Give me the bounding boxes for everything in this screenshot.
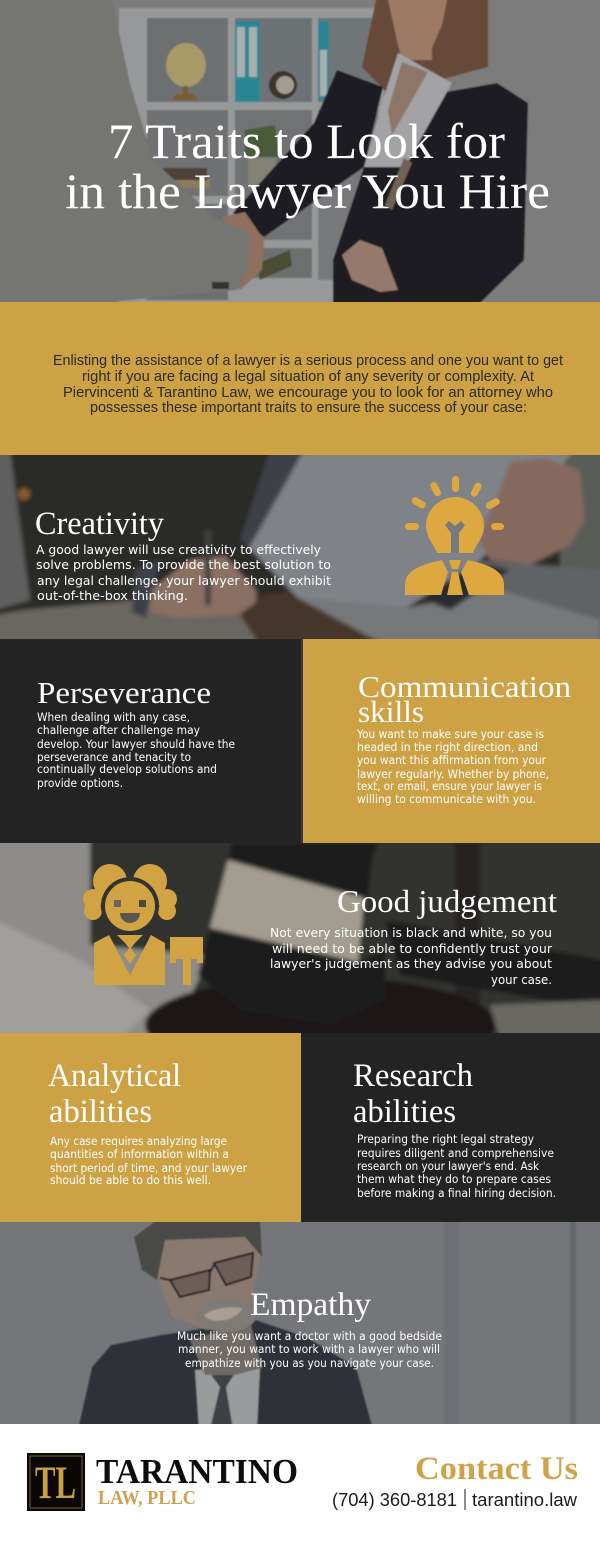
body text: analytical abilities: short period of time, and your lawyer — [50, 1162, 247, 1175]
body text: good judgement: your case. — [491, 972, 552, 987]
panel: empathy — [0, 1217, 600, 1429]
body text: perseverance: challenge after challenge may — [37, 724, 200, 737]
heading: communication skills: Communication — [358, 669, 572, 704]
company name — [96, 1452, 298, 1509]
intro text — [53, 353, 563, 416]
body text: perseverance: continually develop solutions and — [37, 763, 217, 776]
body text: communication skills: you want this affirmation from your — [357, 754, 546, 767]
body text: analytical abilities — [50, 1135, 247, 1187]
contact heading: Contact Us — [415, 1451, 578, 1487]
intro text: Piervincenti & Tarantino Law, we encourage you to look for an attorney who — [63, 385, 553, 401]
heading: empathy: Empathy — [250, 1287, 371, 1323]
body text: creativity: A good lawyer will use creativity to effectively — [36, 542, 322, 557]
body text: perseverance: When dealing with any case, — [37, 711, 190, 724]
body text: analytical abilities: quantities of information within a — [50, 1148, 229, 1161]
heading: perseverance: Perseverance — [37, 675, 211, 710]
body text: perseverance: provide options. — [37, 777, 123, 790]
company name: LAW, PLLC — [98, 1487, 196, 1509]
heading: research abilities: Research — [353, 1058, 473, 1094]
panel: introduction — [0, 302, 600, 455]
intro text: right if you are facing a legal situation of any severity or complexity. At — [82, 369, 534, 385]
body text: perseverance: develop. Your lawyer should have the — [37, 738, 235, 751]
title: 7 Traits to Look for — [108, 113, 505, 169]
heading: creativity: Creativity — [35, 506, 164, 542]
body text: good judgement: Not every situation is black and white, so you — [270, 925, 552, 940]
contact details: (704) 360-8181 — [332, 1490, 457, 1510]
contact details: tarantino.law — [472, 1490, 578, 1510]
contact details — [332, 1489, 578, 1510]
heading: communication skills — [358, 669, 572, 729]
body text: perseverance — [37, 711, 235, 790]
woman figure — [233, 0, 528, 305]
body text: empathy — [177, 1330, 442, 1370]
body text: communication skills: text, or email, ensure your lawyer is — [357, 780, 542, 793]
body text: perseverance: perseverance and tenacity to — [37, 751, 191, 764]
heading: analytical abilities: Analytical — [48, 1058, 181, 1094]
body text: analytical abilities: Any case requires analyzing large — [50, 1135, 227, 1148]
body text: good judgement: will need to be able to confidently trust your — [272, 941, 553, 956]
panel: analytical abilities — [0, 1033, 301, 1222]
body text: research abilities — [357, 1133, 556, 1200]
panel: hero header — [0, 0, 600, 310]
body text: communication skills: headed in the right direction, and — [357, 741, 538, 754]
man's jacket and handshake — [0, 0, 264, 310]
logo badge: TL — [35, 1457, 76, 1509]
logo badge — [27, 1453, 85, 1511]
panel: creativity — [0, 450, 600, 650]
body text: creativity: out-of-the-box thinking. — [37, 588, 188, 603]
body text: communication skills: willing to communicate with you. — [357, 793, 536, 806]
company name: TARANTINO — [96, 1452, 298, 1491]
body text: good judgement — [270, 925, 553, 987]
heading: analytical abilities: abilities — [49, 1094, 152, 1130]
body text: research abilities: them what they do to prepare cases — [357, 1173, 551, 1186]
body text: empathy: Much like you want a doctor with a good bedside — [177, 1330, 442, 1343]
intro text: possesses these important traits to ensure the success of your case: — [90, 400, 527, 416]
panel: research abilities — [301, 1033, 600, 1222]
heading: research abilities: abilities — [353, 1094, 456, 1130]
body text: communication skills: You want to make sure your case is — [356, 728, 544, 741]
body text: creativity: solve problems. To provide the best solution to — [36, 557, 331, 572]
body text: analytical abilities: should be able to do this well. — [50, 1174, 211, 1187]
panel: communication skills — [301, 639, 600, 843]
panel: good judgement — [0, 843, 600, 1033]
body text: research abilities: before making a final hiring decision. — [357, 1187, 556, 1200]
body text: communication skills: lawyer regularly. Whether by phone, — [357, 768, 549, 781]
heading: communication skills: skills — [358, 694, 424, 729]
body text: creativity: any legal challenge, your lawyer should exhibit — [37, 573, 331, 588]
body text: research abilities: research on your lawyer's end. Ask — [357, 1160, 539, 1173]
body text: research abilities: requires diligent and comprehensive — [357, 1147, 554, 1160]
title — [65, 113, 550, 219]
intro text: Enlisting the assistance of a lawyer is a serious process and one you want to get — [53, 353, 563, 369]
heading: analytical abilities — [48, 1058, 181, 1130]
body text: empathy: manner, you want to work with a lawyer who will — [178, 1343, 440, 1356]
body text: good judgement: lawyer's judgement as they advise you about — [270, 956, 552, 971]
panel: perseverance — [0, 639, 301, 843]
heading: research abilities — [353, 1058, 473, 1130]
icon: lightbulb businessman — [405, 476, 504, 595]
body text: creativity — [36, 542, 331, 603]
icon: judge with gavel — [83, 864, 203, 985]
title: in the Lawyer You Hire — [65, 163, 550, 219]
body text: empathy: empathize with you as you navigate your case. — [185, 1357, 434, 1370]
heading: good judgement: Good judgement — [337, 883, 557, 919]
footer — [0, 1424, 600, 1543]
body text: communication skills — [356, 728, 549, 806]
body text: research abilities: Preparing the right legal strategy — [357, 1133, 534, 1146]
